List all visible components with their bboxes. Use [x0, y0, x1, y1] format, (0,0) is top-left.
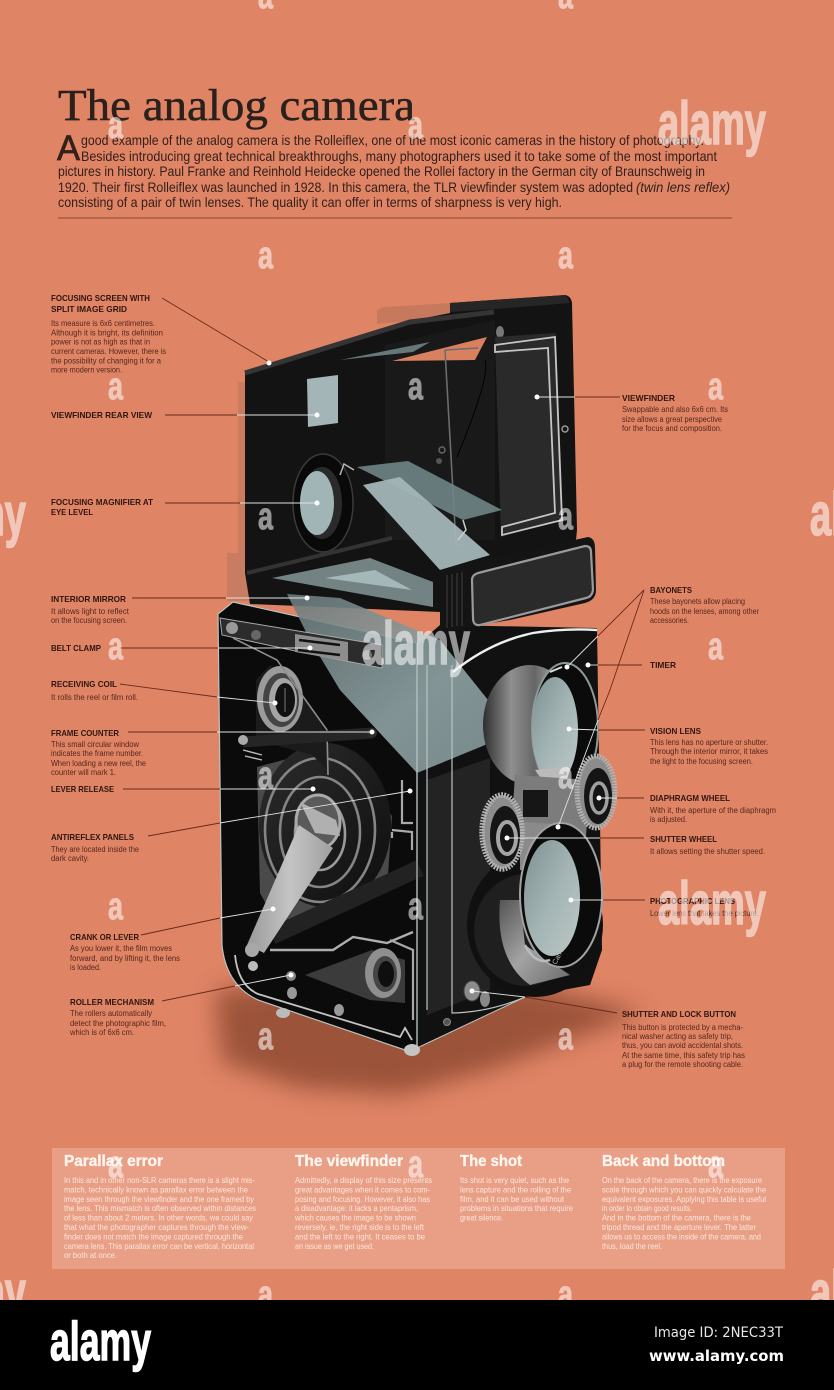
- label: vision lens: Through the interior mirror, it takes: [650, 747, 768, 756]
- watermark tiles: a: [258, 755, 274, 797]
- camera illustration: [218, 295, 615, 1056]
- label: focusing screen: current cameras. However, there is: [51, 347, 166, 356]
- column: parallax error: [64, 1153, 256, 1260]
- label: crank or lever: [70, 933, 180, 972]
- watermark tiles: a: [408, 366, 424, 408]
- watermark tiles: alamy: [658, 90, 766, 157]
- label: bayonets: [650, 586, 759, 625]
- label: roller mechanism: detect the photographic film,: [70, 1019, 166, 1028]
- wire and side pane: [457, 360, 486, 457]
- left cutaway face: [218, 558, 500, 1050]
- column: parallax error: In this and in other non-SLR cameras there is a slight mis-: [64, 1175, 255, 1185]
- shutter wheel: [482, 795, 522, 869]
- column: the shot: The shot: [460, 1153, 522, 1170]
- label: shutter and lock button: SHUTTER AND LOCK BUTTON: [622, 1010, 736, 1019]
- label: focusing screen: the possibility of changing it for a: [51, 356, 162, 365]
- nameplate grip: [440, 537, 596, 632]
- column: back and bottom: tripod thread and the aperture lever. The latter: [602, 1222, 756, 1232]
- column: the viewfinder: Admittedly, a display of this size presents: [295, 1175, 432, 1185]
- label: interior mirror: It allows light to reflect: [51, 607, 130, 616]
- cast shadow: [215, 985, 645, 1095]
- label: diaphragm wheel: DIAPHRAGM WHEEL: [650, 794, 730, 803]
- label: crank or lever: is loaded.: [70, 963, 101, 972]
- label: antireflex panels: They are located inside the: [51, 845, 139, 854]
- label: photographic lens: [650, 897, 759, 918]
- intro paragraph: pictures in history. Paul Franke and Reinhold Heidecke opened the Rollei factory in the German city of Braunschweig in: [58, 163, 705, 179]
- mechanism backplate: [257, 745, 392, 930]
- focusing magnifier: [293, 454, 354, 552]
- lens engraving: Carl Zeiss: [552, 934, 573, 966]
- label: antireflex panels: dark cavity.: [51, 854, 89, 863]
- label: interior mirror: [51, 595, 130, 625]
- label: shutter wheel: [650, 835, 765, 856]
- column: back and bottom: allows us to access the inside of the camera, and: [602, 1231, 761, 1241]
- column: the shot: film, and it can be used without: [460, 1194, 565, 1204]
- label: photographic lens: Lower lens that takes the picture.: [650, 909, 759, 918]
- column: back and bottom: scale through which you can quickly calculate the: [602, 1184, 766, 1194]
- viewfinder hood: [245, 295, 577, 612]
- column: the viewfinder: posing and focusing. However, it also has: [295, 1194, 430, 1204]
- label: shutter and lock button: a plug for the remote shooting cable.: [622, 1060, 743, 1069]
- bottom info panel: [52, 1148, 785, 1269]
- label: roller mechanism: ROLLER MECHANISM: [70, 998, 154, 1007]
- column: back and bottom: equivalent exposures. Applying this table is useful: [602, 1194, 766, 1204]
- label: vision lens: This lens has no aperture or shutter.: [650, 738, 768, 747]
- label: focusing magnifier: FOCUSING MAGNIFIER AT: [51, 498, 153, 507]
- title: The analog camera: [58, 81, 415, 130]
- intro paragraph: (twin lens reflex): [636, 179, 730, 195]
- column: the viewfinder: reversely, ie, the right side is to the left: [295, 1222, 425, 1232]
- label: crank or lever: As you lower it, the film moves: [70, 944, 172, 953]
- label: roller mechanism: The rollers automatically: [70, 1009, 152, 1018]
- label: shutter and lock button: thus, you can avoid accidental shots.: [622, 1041, 743, 1050]
- column: the viewfinder: and the left to the right. It ceases to be: [295, 1231, 425, 1241]
- watermark tiles: a: [108, 626, 124, 668]
- footer logo: alamy: [50, 1310, 151, 1372]
- watermark tiles: a: [558, 235, 574, 277]
- lower photographic lens: [467, 822, 603, 997]
- column: back and bottom: On the back of the camera, there is the exposure: [602, 1175, 762, 1185]
- label: focusing magnifier: [51, 498, 153, 517]
- label: vision lens: the light to the focusing screen.: [650, 757, 753, 766]
- watermark tiles: a: [258, 1274, 274, 1316]
- watermark tiles: a: [408, 886, 424, 928]
- orange opening: [392, 337, 487, 361]
- label: shutter wheel: It allows setting the shutter speed.: [650, 847, 765, 856]
- label: focusing screen: power is not as high as that in: [51, 338, 150, 347]
- shutter and lock button: [444, 981, 490, 1026]
- label: viewfinder: VIEWFINDER: [622, 394, 675, 403]
- label: belt clamp: BELT CLAMP: [51, 644, 102, 653]
- label: focusing screen: FOCUSING SCREEN WITH: [51, 294, 150, 303]
- intro paragraph: Besides introducing great technical breakthroughs, many photographers used it to take some of the most important: [81, 148, 717, 164]
- watermark tiles: a: [558, 1274, 574, 1316]
- label: lever release: LEVER RELEASE: [51, 785, 114, 794]
- column: the viewfinder: a disadvantage: it lacks a pentaprism,: [295, 1203, 418, 1213]
- label: frame counter: FRAME COUNTER: [51, 729, 119, 738]
- label: diaphragm wheel: [650, 794, 776, 824]
- corner structure lines: [417, 643, 525, 1048]
- top belt clamp plate: [220, 618, 382, 668]
- label: roller mechanism: [69, 998, 166, 1037]
- label: shutter and lock button: [622, 1010, 745, 1069]
- label: bayonets: These bayonets allow placing: [650, 597, 745, 606]
- label: photographic lens: PHOTOGRAPHIC LENS: [650, 897, 735, 906]
- label: focusing screen: SPLIT IMAGE GRID: [51, 305, 127, 314]
- column: the shot: problems in situations that require: [460, 1203, 573, 1213]
- bottom plate and roller: [286, 948, 405, 1016]
- hood bottom lip: [247, 538, 392, 573]
- rear view window: [307, 375, 338, 427]
- column: parallax error: the lens. This mismatch is often observed within distances: [64, 1203, 256, 1213]
- watermark tiles: a: [708, 1144, 724, 1186]
- column: the viewfinder: an issue as we get used.: [295, 1241, 374, 1251]
- label: vision lens: VISION LENS: [650, 727, 702, 736]
- watermark tiles: a: [558, 755, 574, 797]
- inner guide lines: [233, 638, 328, 775]
- column: parallax error: Parallax error: [64, 1153, 163, 1170]
- column: parallax error: of less than about 2 meters. In other words, we could say: [64, 1213, 254, 1223]
- label: interior mirror: on the focusing screen.: [51, 616, 127, 625]
- column: the viewfinder: [294, 1153, 432, 1251]
- column: parallax error: match, technically known as parallax error between the: [64, 1184, 248, 1194]
- watermark tiles: a: [408, 1144, 424, 1186]
- leader lines and dots: [120, 298, 645, 1013]
- label: focusing magnifier: EYE LEVEL: [51, 508, 93, 517]
- label: diaphragm wheel: With it, the aperture of the diaphragm: [650, 806, 776, 815]
- website: www.alamy.com: [649, 1347, 784, 1365]
- column: parallax error: image seen through the viewfinder and the one framed by: [64, 1194, 255, 1204]
- label: antireflex panels: [51, 833, 139, 863]
- translucent ghost of hood: [227, 303, 452, 601]
- label: diaphragm wheel: is adjusted.: [650, 815, 687, 824]
- label: viewfinder: for the focus and composition.: [622, 424, 722, 433]
- label: frame counter: [51, 729, 146, 777]
- label: viewfinder: Swappable and also 6x6 cm. Its: [622, 405, 728, 414]
- drop cap: A: [57, 129, 81, 168]
- label: viewfinder: [622, 394, 728, 433]
- label: focusing screen: Its measure is 6x6 centimetres.: [51, 319, 155, 328]
- feet: [276, 1008, 420, 1056]
- label: bayonets: accessories.: [650, 616, 689, 625]
- watermark tiles: a: [558, 496, 574, 538]
- label: bayonets: hoods on the lenses, among other: [650, 607, 759, 616]
- column: back and bottom: And in the bottom of the camera, there is the: [602, 1213, 751, 1223]
- label: frame counter: counter will mark 1.: [51, 768, 116, 777]
- label: focusing screen: more modern version.: [51, 366, 122, 375]
- column: parallax error: camera lens. This parallax error can be vertical, horizontal: [64, 1241, 254, 1251]
- column: parallax error: or both at once.: [64, 1250, 117, 1260]
- column: parallax error: finder does not match the image captured through the: [64, 1231, 243, 1241]
- column: the shot: lens capture and the rolling of the: [460, 1184, 571, 1194]
- intro paragraph: good example of the analog camera is the Rolleiflex, one of the most iconic cameras in the history of photography.: [81, 132, 704, 148]
- label: timer: TIMER: [650, 661, 676, 670]
- column: back and bottom: in order to obtain good results.: [602, 1203, 692, 1213]
- interior mirror: [287, 594, 500, 773]
- label: roller mechanism: which is of 6x6 cm.: [69, 1028, 134, 1037]
- label: antireflex panels: ANTIREFLEX PANELS: [51, 833, 135, 842]
- label: interior mirror: INTERIOR MIRROR: [51, 595, 126, 604]
- centre plate: [510, 775, 590, 850]
- viewfinder door panel: [495, 333, 563, 537]
- upper vision lens: [483, 663, 598, 793]
- watermark tiles: a: [108, 366, 124, 408]
- column: the shot: great silence.: [460, 1213, 503, 1223]
- label: focusing screen: [51, 294, 166, 375]
- footer bar: [0, 1300, 834, 1390]
- label: receiving coil: RECEIVING COIL: [51, 680, 117, 689]
- label: receiving coil: It rolls the reel or film roll.: [51, 693, 138, 702]
- watermark tiles: a: [108, 105, 124, 147]
- intro paragraph: 1920. Their first Rolleiflex was launched in 1928. In this camera, the TLR viewfinder system was adopted: [58, 179, 633, 195]
- crank lever: [245, 795, 340, 971]
- label: shutter and lock button: This button is protected by a mecha-: [622, 1023, 743, 1032]
- column: back and bottom: Back and bottom: [602, 1153, 725, 1170]
- watermark tiles: a: [258, 496, 274, 538]
- column: the shot: [460, 1153, 573, 1223]
- label: shutter and lock button: At the same time, this safety trip has: [622, 1051, 745, 1060]
- upper focusing glass: [357, 461, 502, 520]
- column: back and bottom: thus, load the reel.: [602, 1241, 662, 1251]
- column: the viewfinder: which causes the image to be shown: [294, 1213, 416, 1223]
- label: crank or lever: CRANK OR LEVER: [70, 933, 139, 942]
- watermark tiles: a: [108, 1144, 124, 1186]
- diaphragm wheel: [577, 756, 615, 828]
- white arc: [453, 629, 597, 672]
- watermark tiles: a: [708, 366, 724, 408]
- watermark tiles: a: [258, 235, 274, 277]
- film spiral: [259, 743, 391, 907]
- label: shutter wheel: SHUTTER WHEEL: [650, 835, 717, 844]
- label: viewfinder rear view: VIEWFINDER REAR VIEW: [51, 411, 152, 420]
- column: the viewfinder: great advantages when it comes to com-: [295, 1184, 430, 1194]
- label: frame counter: When loading a new reel, the: [51, 759, 146, 768]
- rails: [272, 868, 420, 936]
- column: the shot: Its shot is very quiet, such as the: [460, 1175, 569, 1185]
- column: the viewfinder: The viewfinder: [295, 1153, 403, 1170]
- watermark tiles: a: [258, 1016, 274, 1058]
- watermark tiles: a: [708, 626, 724, 668]
- label: focusing screen: Although it is bright, its definition: [51, 328, 163, 337]
- label: bayonets: BAYONETS: [650, 586, 692, 595]
- receiving coil: [256, 665, 328, 770]
- label: shutter and lock button: nical washer acting as safety trip,: [622, 1032, 733, 1041]
- label: vision lens: [650, 727, 768, 766]
- right face of camera body: [417, 625, 602, 1048]
- intro paragraph: [57, 129, 730, 210]
- label: frame counter: indicates the frame number.: [51, 749, 143, 758]
- label: crank or lever: forward, and by lifting it, the lens: [70, 954, 180, 963]
- watermark tiles: alamy: [658, 870, 766, 937]
- label: frame counter: This small circular window: [51, 740, 139, 749]
- watermark tiles: a: [558, 1016, 574, 1058]
- image id: Image ID: 2NEC33T: [654, 1325, 783, 1341]
- label: viewfinder: size allows a great perspective: [622, 415, 722, 424]
- watermark tiles: alamy: [362, 610, 470, 677]
- watermark tiles: a: [408, 105, 424, 147]
- hood glass strip: [340, 342, 430, 360]
- watermark tiles: a: [108, 886, 124, 928]
- label: receiving coil: [51, 680, 138, 702]
- column: back and bottom: [602, 1153, 766, 1251]
- intro paragraph: consisting of a pair of twin lenses. The quality it can offer in terms of sharpness is very high.: [58, 194, 562, 210]
- column: parallax error: that what the photographer captures through the view-: [64, 1222, 249, 1232]
